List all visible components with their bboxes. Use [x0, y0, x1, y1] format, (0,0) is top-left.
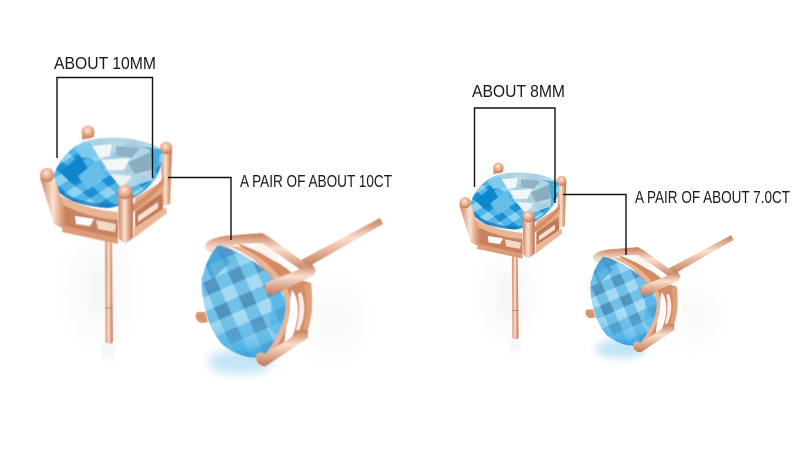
label: about 8mm: ABOUT 8MM	[472, 81, 565, 101]
bracket: 8mm width	[474, 108, 555, 203]
earring: 10mm front view	[196, 218, 383, 374]
earring: 10mm side view	[40, 126, 172, 357]
earring: 8mm front view	[586, 235, 734, 358]
panel: 8mm earrings	[459, 81, 790, 358]
connector: 7.0ct	[563, 194, 626, 255]
panel: 10mm earrings	[40, 53, 392, 374]
connector: 10ct	[168, 178, 231, 240]
label: pair of about 10ct: A PAIR OF ABOUT 10CT	[240, 171, 392, 191]
label: about 10mm: ABOUT 10MM	[54, 53, 156, 73]
bracket: 10mm width	[57, 78, 152, 178]
earring: 8mm side view	[459, 163, 566, 350]
infographic: topaz stud earring size comparison	[39, 57, 790, 379]
